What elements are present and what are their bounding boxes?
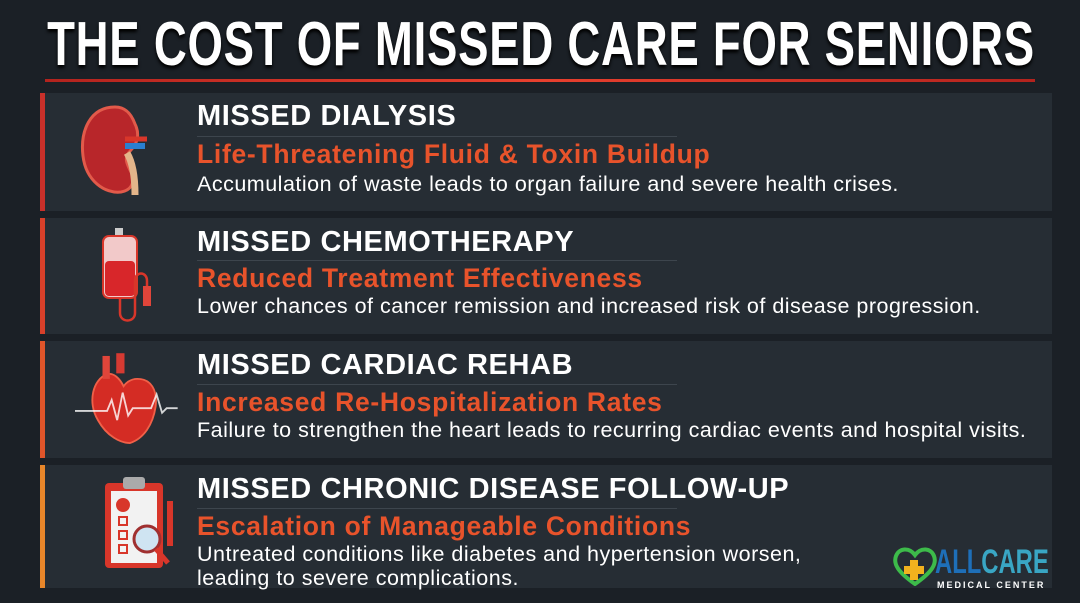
- description: Untreated conditions like diabetes and hypertension worsen,: [197, 542, 801, 566]
- description: leading to severe complications.: [197, 566, 519, 590]
- subtitle: Life-Threatening Fluid & Toxin Buildup: [197, 139, 710, 169]
- heading: MISSED DIALYSIS: [197, 100, 456, 132]
- logo: AllCare Medical Center: [893, 543, 1049, 590]
- subtitle: Reduced Treatment Effectiveness: [197, 263, 643, 293]
- icon: clipboard: [105, 477, 173, 568]
- description: [197, 542, 801, 590]
- icon: IV bag: [102, 228, 151, 322]
- panel: missed dialysis: [40, 93, 1052, 211]
- icon: heart: [75, 353, 178, 444]
- logo: AllCare Medical Center: MEDICAL CENTER: [937, 580, 1045, 590]
- icon: heart with cross: [893, 548, 937, 586]
- heading: MISSED CHRONIC DISEASE FOLLOW-UP: [197, 473, 789, 505]
- title: THE COST OF MISSED CARE FOR SENIORS: [47, 10, 1035, 79]
- subtitle: Increased Re-Hospitalization Rates: [197, 387, 663, 417]
- icon: kidney: [80, 106, 147, 195]
- panel: missed cardiac rehab: [40, 341, 1052, 458]
- logo: AllCare Medical Center: ALLCARE: [935, 543, 1049, 581]
- heading: MISSED CARDIAC REHAB: [197, 349, 573, 381]
- description: Accumulation of waste leads to organ failure and severe health crises.: [197, 172, 899, 196]
- description: Lower chances of cancer remission and increased risk of disease progression.: [197, 294, 981, 318]
- heading: MISSED CHEMOTHERAPY: [197, 226, 574, 258]
- panel: missed chronic disease follow-up: [40, 465, 1052, 588]
- description: Failure to strengthen the heart leads to recurring cardiac events and hospital visits.: [197, 418, 1026, 442]
- subtitle: Escalation of Manageable Conditions: [197, 511, 691, 541]
- panel: missed chemotherapy: [40, 218, 1052, 334]
